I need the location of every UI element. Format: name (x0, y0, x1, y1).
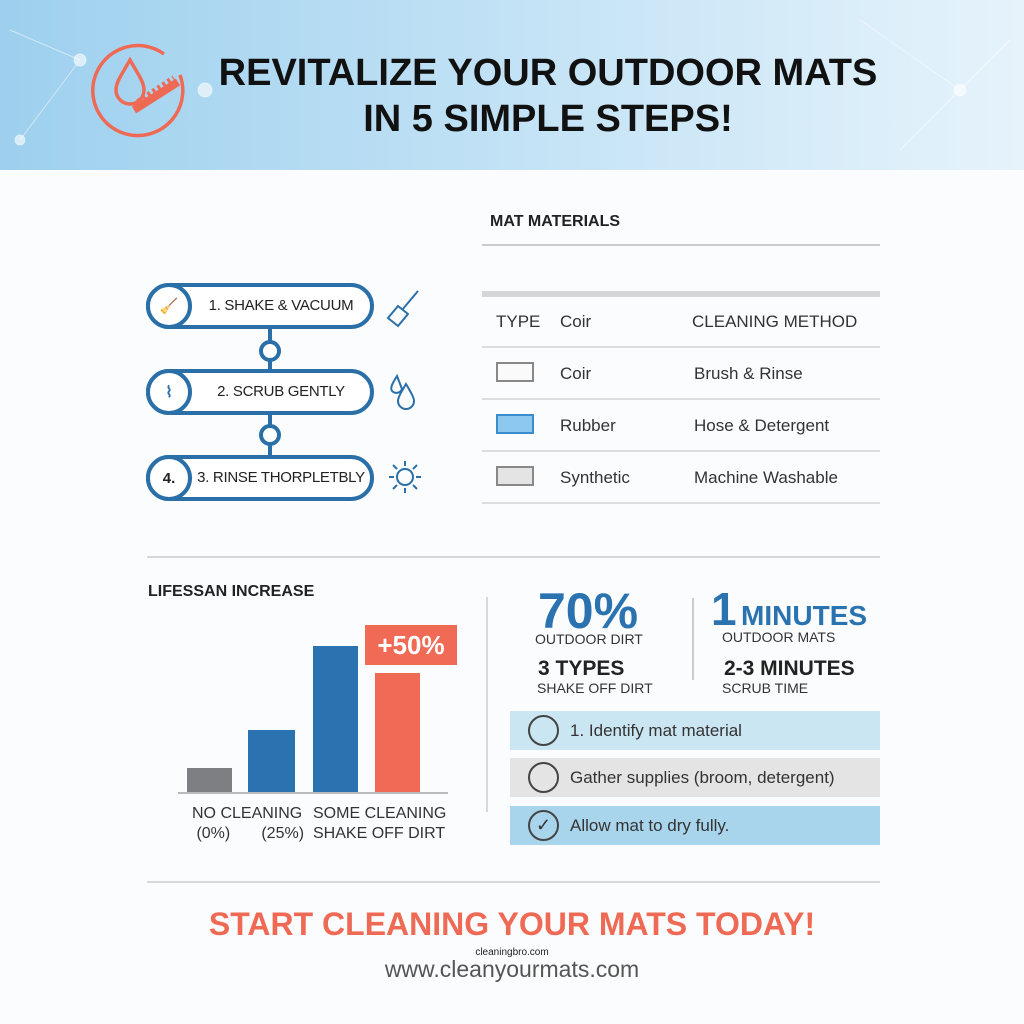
callout +50%: +50% (377, 630, 445, 660)
panel: steps (259, 329, 281, 455)
header banner (0, 0, 1024, 170)
icon: logo drop and brush (91, 44, 185, 138)
chart: lifespan increase: NO CLEANING (192, 805, 302, 822)
stats: 2-3 MINUTES (724, 657, 855, 680)
table header: Coir (560, 312, 591, 331)
stats: OUTDOOR DIRT (535, 631, 643, 647)
stats: 70% (538, 583, 638, 639)
callout +50% (365, 625, 457, 665)
icon: drops (390, 374, 415, 410)
row rubber: Hose & Detergent (694, 416, 829, 435)
text: cleaningbro.com (475, 947, 549, 958)
step 2: 2. SCRUB GENTLY (217, 383, 345, 400)
step 1 (146, 283, 374, 329)
text: Gather supplies (broom, detergent) (570, 768, 835, 787)
icon: sun (389, 461, 421, 493)
stats: SHAKE OFF DIRT (537, 680, 653, 696)
stats: 1 MINUTES (711, 583, 867, 635)
stats: SCRUB TIME (722, 680, 808, 696)
chart: lifespan increase (148, 583, 457, 842)
chart: lifespan increase: LIFESSAN INCREASE (148, 583, 314, 600)
step 2 (146, 369, 374, 415)
chart: lifespan increase: (0%) (25%) (196, 825, 304, 842)
heading: MAT MATERIALS (490, 213, 620, 230)
row rubber (482, 400, 880, 452)
stats: OUTDOOR MATS (722, 629, 835, 645)
footer call to action: START CLEANING YOUR MATS TODAY! (209, 906, 815, 942)
table header: TYPE (496, 312, 540, 331)
footer url: www.cleanyourmats.com (385, 956, 639, 982)
title: REVITALIZE YOUR OUTDOOR MATS (219, 52, 877, 94)
step 2: ⌇ (165, 384, 173, 401)
text: Allow mat to dry fully. (570, 816, 729, 835)
text: ✓ (536, 815, 551, 835)
step 1: 🧹 (160, 298, 178, 315)
title: IN 5 SIMPLE STEPS! (363, 98, 733, 140)
step 3 (146, 455, 374, 501)
stats: 3 TYPES (538, 657, 624, 680)
checklist (510, 711, 880, 750)
step 3: 3. RINSE THORPLETBLY (197, 469, 365, 486)
icon: brush (386, 290, 419, 328)
table header (482, 296, 880, 348)
table header: CLEANING METHOD (692, 312, 857, 331)
stats (535, 583, 867, 696)
checklist: 1. Identify mat material (570, 721, 742, 740)
row synthetic: Synthetic (560, 468, 630, 487)
chart: lifespan increase: SOME CLEANING (313, 805, 446, 822)
step 1: 1. SHAKE & VACUUM (209, 297, 353, 314)
chart: lifespan increase: SHAKE OFF DIRT (313, 825, 445, 842)
step 3: 4. (163, 470, 175, 486)
panel: mat materials table (482, 213, 880, 297)
row synthetic: Machine Washable (694, 468, 838, 487)
row synthetic (482, 452, 880, 504)
row coir: Coir (560, 364, 591, 383)
title (219, 52, 877, 140)
row coir: Brush & Rinse (694, 364, 803, 383)
row coir (482, 348, 880, 400)
row rubber: Rubber (560, 416, 616, 435)
